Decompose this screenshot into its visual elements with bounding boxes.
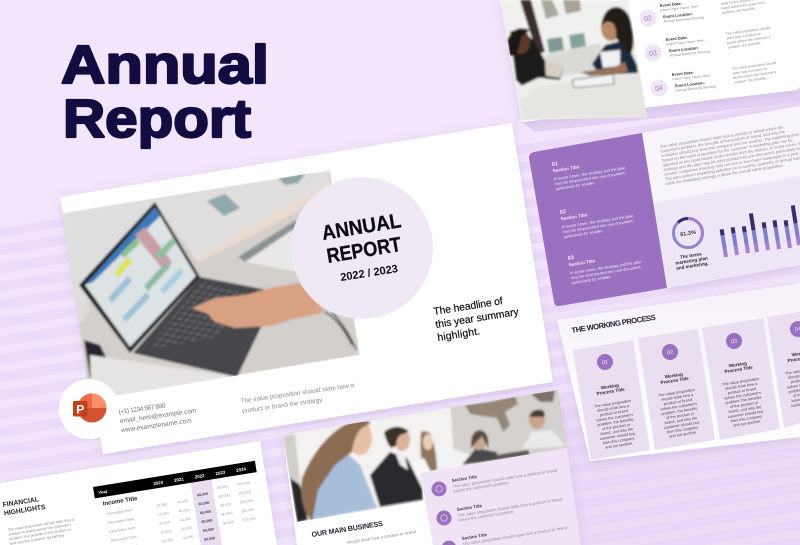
woman in blue shirt — [308, 453, 377, 520]
section 02: In some cases, the strategy and the plan — [562, 213, 634, 229]
far-right man — [522, 430, 566, 449]
contact details — [117, 398, 198, 434]
income table: 40,000 — [177, 499, 188, 505]
section 02: may be incorporated into one document, — [562, 218, 634, 234]
step 02: solves the customer's — [660, 401, 697, 412]
cover title circle: ANNUAL — [320, 209, 403, 245]
income table: Description here — [111, 535, 137, 543]
step 02 — [638, 329, 715, 450]
event 03: 03 — [649, 50, 658, 58]
event 04: Event Date: — [672, 70, 694, 77]
photo: laptop on a desk — [62, 170, 360, 410]
value proposition note: The value proposition should state how a — [240, 382, 355, 405]
income table: 100,000 — [240, 499, 253, 505]
income table: 40,000 — [181, 526, 193, 531]
donut caption — [674, 250, 709, 271]
income table: Year — [98, 489, 108, 495]
step 04 — [767, 312, 800, 428]
income table: 20,000 — [156, 502, 168, 508]
section 02 — [559, 199, 635, 239]
income table: 20,000 — [157, 511, 169, 517]
income table: 100,000 — [241, 508, 254, 514]
step 03: from this company — [730, 413, 762, 423]
marketing paragraph: while the marketing strategy outlines the overall value proposition. — [665, 162, 784, 186]
step 03 — [702, 318, 780, 440]
event 04: Event Location: — [675, 80, 705, 88]
event 02: problem, the benefits... — [722, 6, 758, 15]
panel: working process slide — [557, 283, 800, 461]
step 03: solves the customer's — [724, 390, 761, 401]
financial paragraph: product or brand solves the customer's — [8, 523, 72, 537]
income table: 80,000 — [220, 502, 231, 508]
income table: 60,000 — [201, 518, 213, 524]
event 04: problem, the benefits... — [734, 76, 769, 85]
income table: 60,000 — [204, 536, 216, 542]
income table: 40,000 — [183, 535, 194, 540]
panel: financial highlights slide — [0, 441, 277, 545]
income table: 60,000 — [198, 501, 210, 506]
headline — [433, 296, 520, 344]
woman 2 — [420, 431, 437, 472]
income table: 2024 — [236, 466, 247, 473]
panel: main annual report cover — [60, 123, 553, 454]
section 03 — [567, 245, 643, 285]
step 02: from this company — [666, 424, 698, 434]
marketing paragraph: based on the value proposition for the customer. A marketing plan can be — [662, 137, 794, 163]
income table: Description here — [108, 517, 134, 525]
event 03: brand solves the customer's — [727, 35, 771, 45]
financial paragraph: problem, the benefits of the product or — [9, 527, 72, 541]
title — [61, 35, 269, 149]
man in suit — [370, 452, 423, 507]
step 02: brand, and why the — [664, 415, 698, 425]
contact details: www.examplename.com — [120, 417, 192, 434]
panel: main business slide — [280, 385, 581, 545]
event 03: state how a product or — [726, 32, 762, 41]
marketing paragraph: customer's problem, the benefits of the product or brand, and why the — [660, 129, 786, 154]
step 03: brand, and why the — [728, 404, 762, 414]
event 03: The value proposition should — [726, 26, 771, 36]
income table: 2023 — [215, 470, 226, 476]
section 02: 02 — [559, 209, 566, 216]
income table: 2022 — [194, 473, 205, 480]
cover title circle — [291, 177, 433, 319]
event 03: Event Location: — [669, 45, 699, 53]
income table: 20,000 — [160, 529, 172, 535]
headline: this year summary — [435, 307, 520, 331]
event 04: Insert Place Name Here — [672, 73, 711, 81]
step 03: of the product or — [730, 400, 759, 409]
middle woman — [462, 448, 497, 465]
value proposition note — [240, 382, 357, 415]
step 02: should state how a — [661, 392, 694, 402]
panel: marketing slide — [529, 106, 800, 306]
step 02: product or brand — [663, 397, 692, 406]
donut caption: and marketing. — [676, 261, 709, 271]
income table: 2020 — [153, 480, 164, 486]
step 01: The value proposition — [594, 398, 631, 409]
step 03: and not another. — [733, 418, 761, 428]
photo: two women at a table — [500, 0, 650, 125]
step 01: brand, and why the — [600, 426, 634, 436]
section 03: Section Title — [568, 258, 596, 267]
step 01: product or brand — [599, 408, 628, 417]
event 03: Event Date: — [666, 35, 688, 42]
step 01: of the product or — [602, 422, 631, 431]
step 03: The value proposition — [722, 376, 759, 387]
event 02: 02 — [644, 15, 653, 23]
income table: 60,000 — [197, 492, 208, 497]
income table: 20,000 — [162, 538, 173, 544]
main business heading: OUR MAIN BUSINESS — [311, 519, 384, 539]
lilac sections panel — [420, 448, 581, 545]
section row 2: The value proposition should state how a product or brand — [457, 496, 563, 518]
event 03 — [644, 26, 772, 61]
financial heading: FINANCIAL — [2, 496, 39, 509]
step 02: 02 — [667, 350, 674, 356]
section 02: particularly for smaller. — [563, 228, 604, 239]
marketing paragraph: The plan outlines marketing activities on a monthly, quarterly, or annual basis — [665, 155, 800, 181]
event 02 — [640, 0, 766, 27]
donut caption: The terms — [680, 251, 702, 260]
marketing paragraph: customer should buy from this company and not another. The marketing plan is — [661, 131, 800, 158]
stacked bar chart — [720, 205, 800, 257]
step 03: Process Title — [724, 365, 753, 374]
section 03: particularly for smaller. — [571, 274, 612, 285]
marketing paragraph — [659, 122, 800, 186]
marketing paragraph: The value proposition should state how a product or brand solves the — [659, 124, 784, 149]
income table: 100,000 — [242, 516, 256, 522]
event 02: brand solves the customer's — [721, 1, 765, 11]
section row 1: The value proposition should state how a product or brand — [452, 467, 558, 489]
section row 1 — [432, 461, 559, 496]
section 01 — [551, 151, 627, 191]
section 01: may be incorporated into one document, — [554, 170, 626, 186]
financial paragraph — [8, 517, 78, 545]
icon: PowerPoint badge — [59, 379, 119, 439]
step 01: 01 — [602, 360, 609, 366]
title: Report — [63, 89, 251, 149]
event rows — [640, 0, 778, 97]
step 03: Working — [728, 361, 747, 368]
contact details: (+1) 1234 567 890 — [118, 402, 166, 416]
income table: 80,000 — [221, 511, 233, 517]
event 04: Annual Business Meeting — [675, 84, 716, 93]
financial paragraph: The value proposition should state how a — [8, 517, 75, 532]
section row 2: Section Title — [456, 503, 483, 512]
section row 2: solves the customer's problem. — [458, 509, 514, 523]
section 01: Section Title — [552, 164, 580, 173]
financial heading: HIGHLIGHTS — [4, 504, 47, 517]
step 01: and not another. — [605, 440, 633, 450]
step 03: customer should buy — [727, 409, 764, 419]
event 04: The value proposition should — [732, 61, 777, 71]
marketing paragraph: adjusted at any point based on the results from the metrics. In some cases, the — [662, 140, 800, 168]
section row 2 — [436, 490, 564, 526]
section row 1: Section Title — [451, 474, 478, 483]
income table: 80,000 — [218, 493, 230, 499]
event 04 — [650, 61, 778, 96]
photo: business team — [283, 390, 567, 522]
section 01: particularly for smaller. — [555, 180, 596, 191]
headline: highlight. — [437, 326, 481, 344]
laptop keyboard — [133, 277, 278, 377]
step 02: of the product or — [666, 411, 695, 420]
event 03: Insert Place Name Here — [666, 38, 705, 46]
income table: 80,000 — [223, 520, 234, 526]
step 03: should state how a — [725, 381, 758, 391]
papers — [88, 353, 236, 395]
step 01: customer should buy — [599, 431, 636, 441]
hand — [192, 283, 325, 328]
donut chart — [674, 218, 702, 248]
section 02: Section Title — [560, 212, 588, 221]
income table: Description here — [106, 508, 133, 516]
step 01: Process Title — [596, 387, 625, 396]
section row 3 — [442, 519, 568, 545]
income table: 60,000 — [200, 509, 211, 515]
step 01: Working — [600, 383, 619, 390]
step 02: and not another. — [669, 429, 697, 439]
event 02: Insert Place Name Here — [660, 4, 699, 12]
income table — [93, 461, 267, 545]
icon: PowerPoint badge: P — [76, 402, 84, 416]
income table: Income Title — [102, 496, 139, 508]
section 03: 03 — [567, 255, 574, 262]
step 03: product or brand — [727, 386, 756, 395]
donut chart: 61.3% — [680, 230, 696, 238]
marketing paragraph: strategy and the plan may be incorporated into one document, particularly for — [663, 145, 800, 172]
section 03: In some cases, the strategy and the plan — [570, 259, 642, 275]
headline: The headline of — [433, 296, 504, 318]
step 01: from this company — [602, 435, 634, 445]
step 01: should state how a — [597, 403, 630, 413]
event 03: Annual Business Meeting — [669, 49, 710, 58]
step 02: Process Title — [660, 376, 689, 385]
income table: 40,000 — [178, 508, 190, 514]
income table: 20,000 — [159, 520, 170, 526]
income table: 60,000 — [203, 527, 214, 533]
step 01: solves the customer's — [596, 412, 633, 423]
cover title circle: REPORT — [325, 233, 403, 268]
income table: 80,000 — [217, 484, 228, 490]
value proposition note: product or brand the strategy. — [242, 396, 324, 415]
event 04: 04 — [655, 85, 664, 93]
laptop screen — [79, 202, 200, 353]
event 04: brand solves the customer's — [733, 70, 777, 80]
main business paragraph: should state how a product or brand — [346, 529, 417, 545]
section 01: In some cases, the strategy and the plan — [554, 165, 626, 181]
step 03: problem, the benefits — [725, 395, 762, 405]
cover title circle: 2022 / 2023 — [340, 263, 399, 284]
section row 3: Section Title — [461, 532, 488, 541]
step 02: problem, the benefits — [661, 406, 698, 416]
title: Annual — [61, 35, 269, 95]
event 02: Event Date: — [660, 1, 682, 8]
step 01: problem, the benefits — [597, 417, 634, 427]
income table: 100,000 — [237, 481, 250, 487]
event 03: problem, the benefits... — [728, 41, 763, 50]
donut caption: marketing plan — [675, 256, 708, 266]
purple section panel — [529, 133, 667, 306]
step 01 — [573, 340, 650, 460]
event 02: Annual Business Meeting — [663, 15, 704, 24]
step 03: 03 — [731, 339, 738, 345]
income table: 100,000 — [238, 490, 252, 496]
contact details: email_here@example.com — [120, 407, 197, 425]
panel: top right event slide — [500, 0, 800, 125]
financial heading — [2, 495, 47, 517]
section row 1: solves the customer's problem. — [453, 480, 509, 494]
income table: 2021 — [174, 476, 185, 483]
event 04: state how a product or — [732, 67, 768, 76]
event 02: Event Location: — [663, 11, 693, 19]
step 02: customer should buy — [663, 420, 700, 430]
heading: THE WORKING PROCESS — [571, 313, 656, 335]
step 02: The value proposition — [658, 387, 695, 398]
marketing paragraph: smaller companies that may only run one or two major campaigns in a year. — [664, 150, 800, 177]
step 02: Working — [664, 372, 683, 379]
income table: 40,000 — [180, 517, 191, 522]
section 03: may be incorporated into one document, — [570, 264, 642, 280]
section 01: 01 — [551, 161, 558, 168]
income table: Description here — [109, 526, 136, 534]
